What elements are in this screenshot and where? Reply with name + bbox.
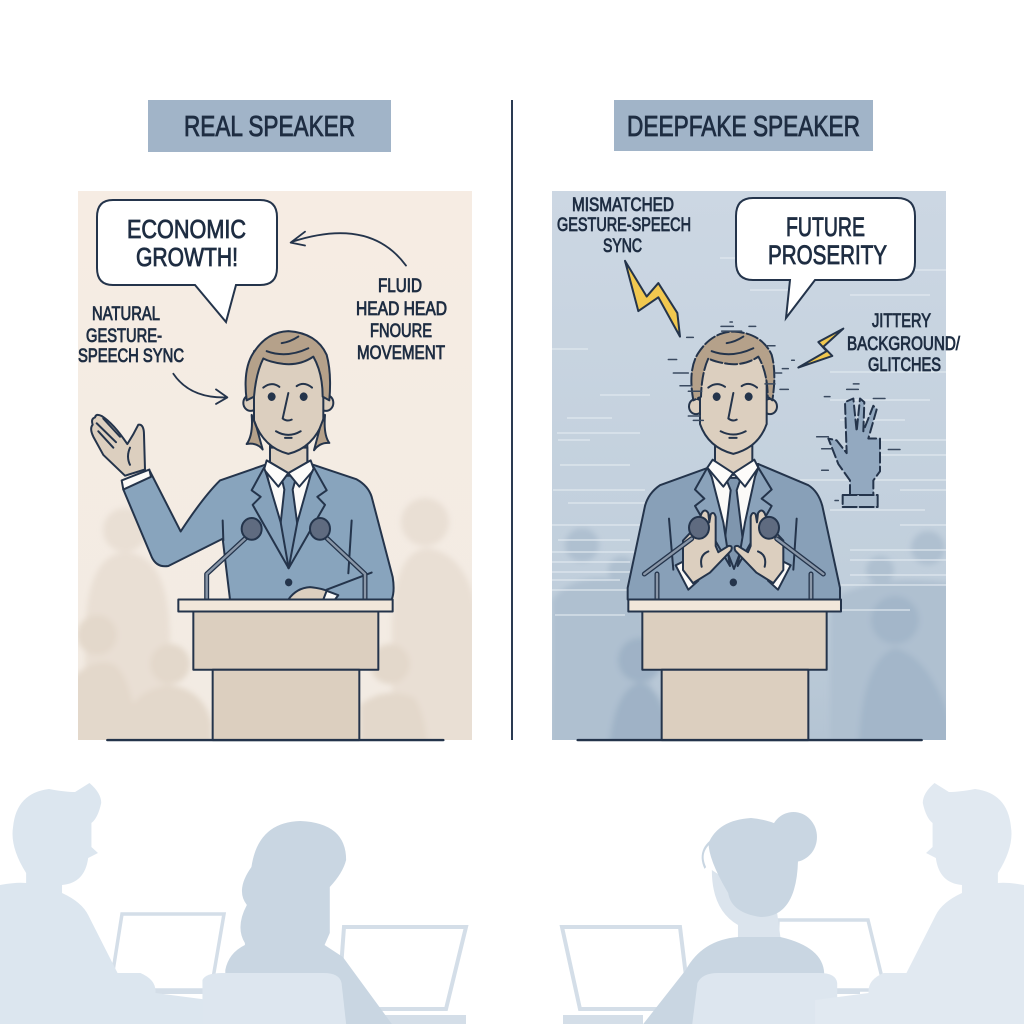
annotation: natural gesture-speech sync: SPEECH SYNC bbox=[78, 346, 184, 367]
panel: real speaker bbox=[70, 191, 478, 760]
speech bubble: future proserity: PROSERITY bbox=[768, 240, 887, 270]
collar bbox=[707, 460, 758, 487]
annotation: fluid head movement bbox=[356, 276, 447, 364]
resting hand bbox=[288, 587, 337, 600]
speech bubble: economic growth: GROWTH! bbox=[136, 242, 238, 272]
annotation: fluid head movement: FLUID bbox=[378, 276, 422, 297]
arrow: fluid movement to bubble bbox=[291, 232, 406, 266]
annotation: fluid head movement: MOVEMENT bbox=[357, 343, 445, 364]
raised hand bbox=[91, 415, 145, 476]
annotation: mismatched gesture-speech sync: SYNC bbox=[603, 236, 642, 257]
heading: real speaker bbox=[148, 100, 391, 152]
annotation: jittery background glitches: GLITCHES bbox=[868, 355, 941, 376]
arrow: gesture sync to head bbox=[173, 374, 227, 404]
foreground audience with laptops bbox=[0, 783, 1024, 1024]
speech bubble: future proserity bbox=[736, 198, 915, 318]
annotation: natural gesture-speech sync: NATURAL bbox=[92, 304, 160, 325]
collar bbox=[264, 460, 314, 487]
annotation: natural gesture-speech sync: GESTURE- bbox=[86, 326, 162, 347]
laptop bases bbox=[150, 990, 860, 1024]
annotation: jittery background glitches: JITTERY bbox=[872, 311, 931, 332]
hair bbox=[246, 331, 330, 400]
background glitch streaks bbox=[552, 258, 946, 615]
neck bbox=[715, 444, 752, 475]
face bbox=[243, 395, 258, 411]
eyes nose mouth bbox=[714, 393, 720, 400]
real speaker figure bbox=[91, 232, 443, 740]
jacket and raised arm bbox=[123, 465, 394, 600]
annotation: jittery background glitches bbox=[847, 311, 961, 376]
heading: deepfake speaker bbox=[614, 100, 873, 151]
microphones bbox=[644, 539, 823, 600]
hair bbox=[691, 331, 774, 400]
annotation: jittery background glitches: BACKGROUND/ bbox=[847, 334, 961, 355]
annotation: mismatched gesture-speech sync: MISMATCHED bbox=[572, 195, 674, 216]
speech bubble: economic growth: ECONOMIC bbox=[127, 214, 246, 244]
panel: deepfake speaker bbox=[552, 191, 961, 760]
tie bbox=[724, 478, 743, 569]
head glitch dashes bbox=[668, 322, 794, 420]
podium bbox=[628, 600, 841, 612]
background audience silhouettes bbox=[78, 498, 472, 740]
shirt bbox=[708, 464, 758, 566]
lapels bbox=[695, 468, 730, 566]
lightning bolt: jitter bbox=[798, 329, 843, 368]
lightning bolt: mismatched sync bbox=[625, 261, 680, 337]
glitching hand bbox=[828, 399, 880, 495]
audience member: right woman bbox=[643, 812, 837, 1024]
microphones bbox=[207, 539, 365, 600]
cuffs bbox=[676, 562, 791, 590]
annotation: mismatched gesture-speech sync: GESTURE-SPEECH bbox=[557, 215, 691, 236]
background audience silhouettes bbox=[552, 528, 946, 740]
jacket bbox=[628, 464, 840, 600]
neck and shirt bbox=[265, 444, 313, 568]
lapels bbox=[252, 468, 289, 568]
audience member: right man bbox=[815, 783, 1024, 1024]
audience member: left woman bbox=[202, 821, 392, 1024]
tie bbox=[278, 476, 300, 567]
face bbox=[689, 399, 703, 414]
annotation: natural gesture-speech sync bbox=[78, 304, 184, 367]
annotation: mismatched gesture-speech sync bbox=[557, 195, 691, 257]
podium bbox=[178, 600, 393, 612]
center divider bbox=[511, 100, 513, 740]
heading: deepfake speaker: DEEPFAKE SPEAKER bbox=[627, 111, 860, 143]
eyes nose mouth bbox=[269, 393, 275, 400]
annotation: fluid head movement: FNOURE bbox=[370, 321, 432, 342]
laptop: screens bbox=[110, 914, 885, 1009]
annotation: fluid head movement: HEAD HEAD bbox=[356, 299, 447, 320]
heading: real speaker: REAL SPEAKER bbox=[184, 111, 355, 143]
deepfake speaker figure bbox=[578, 261, 922, 740]
gesturing hands bbox=[683, 510, 732, 583]
audience member: left man bbox=[0, 783, 209, 1024]
right forearm bbox=[327, 573, 372, 590]
speech bubble: economic growth bbox=[97, 200, 277, 322]
speech bubble: future proserity: FUTURE bbox=[786, 212, 865, 242]
